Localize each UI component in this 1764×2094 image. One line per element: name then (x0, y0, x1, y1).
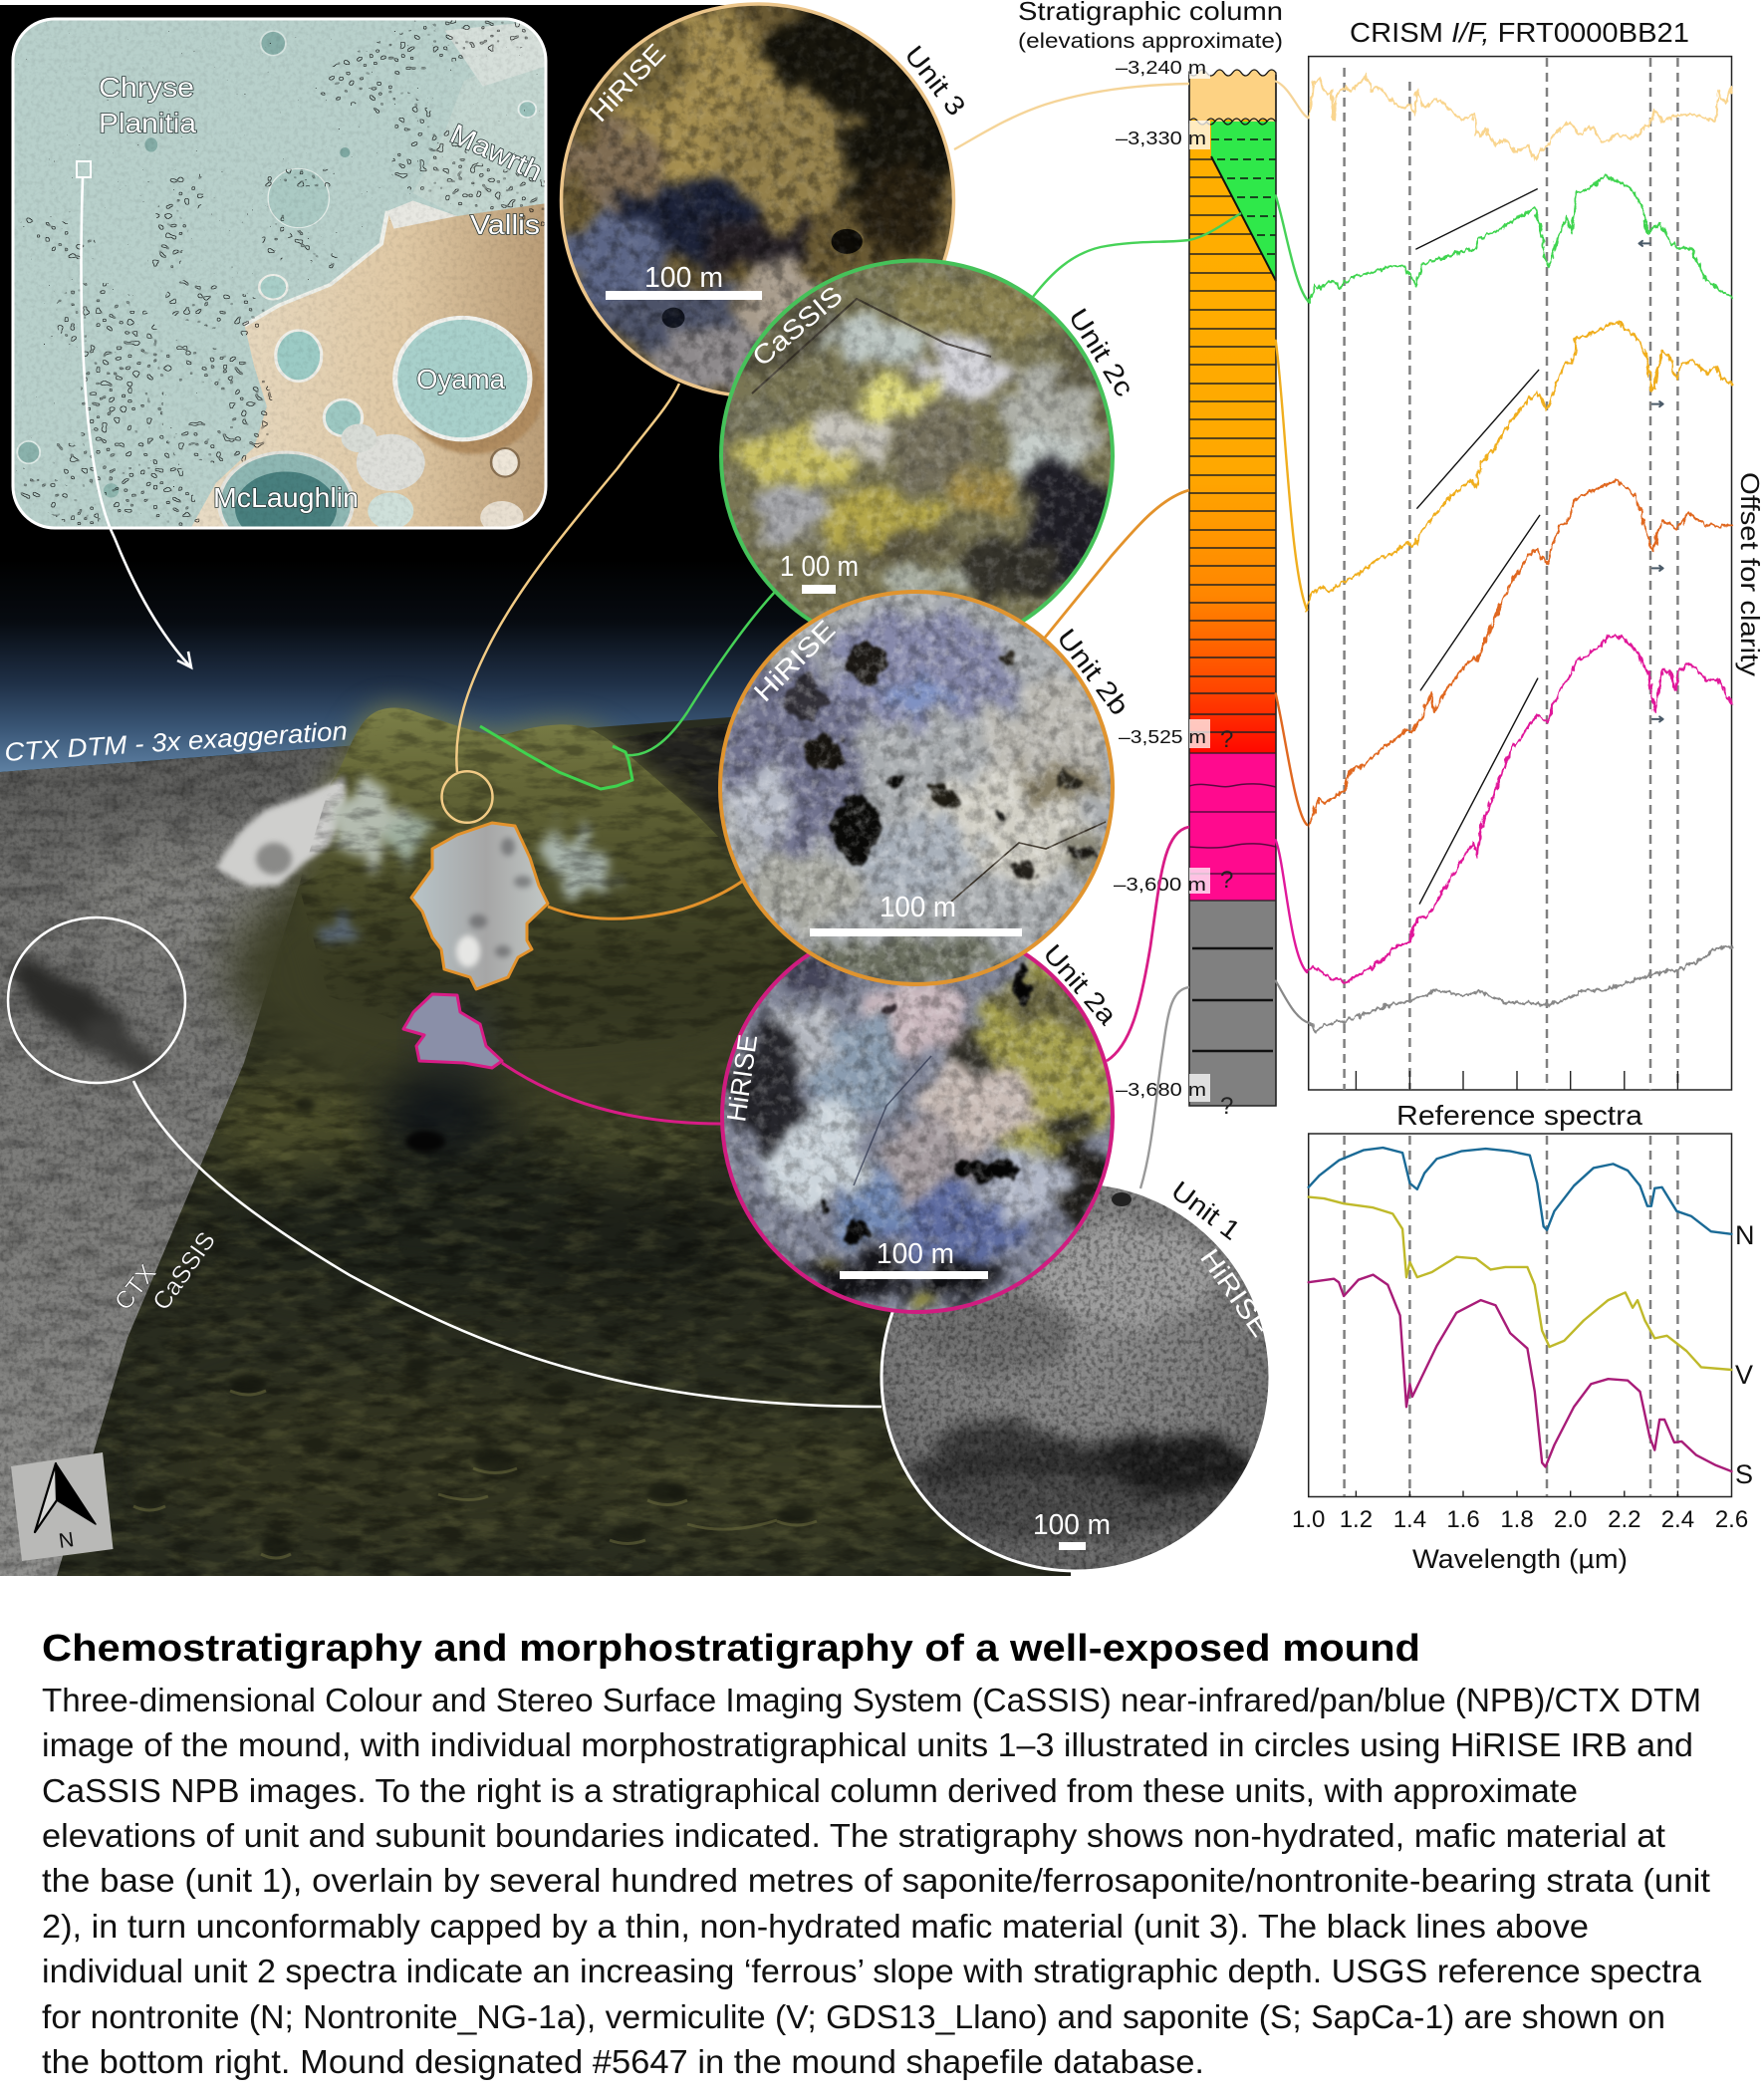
connector: unit 3 circle to mound (456, 384, 679, 772)
elevation label: -3,600 m: ? (1220, 867, 1233, 894)
unit 3 yellow layer (1189, 70, 1276, 125)
map label: Mawrth Vallis: Vallis (470, 209, 540, 240)
stratigraphic column title: (elevations approximate) (1018, 30, 1283, 53)
scale bar: 100 m: 100 m (877, 1238, 954, 1270)
unit 2c green wedge (1211, 122, 1276, 281)
connector: unit 2a circle to mound (502, 1063, 721, 1124)
map label: Mawrth Vallis (445, 118, 547, 240)
connector: unit 2b circle to mound (548, 881, 743, 918)
connector: unit 2c to column (1033, 213, 1241, 297)
x axis tick labels: 2.4 (1661, 1506, 1694, 1533)
spectrum: unit 2a (1307, 637, 1731, 982)
stratigraphic column title (1018, 0, 1283, 53)
scale bar: 100 m (840, 1238, 988, 1279)
x axis tick labels: 1.4 (1393, 1506, 1426, 1533)
map label: Mawrth Vallis: Mawrth (445, 118, 547, 187)
unit labels: Unit 1 (1165, 1176, 1246, 1246)
scale bar: 100 m: 100 m (1033, 1509, 1111, 1541)
ferrous slope lines (1416, 189, 1540, 904)
caption body text: Three-dimensional Colour and Stereo Surface Imaging System (CaSSIS) near-infrared/pan/blue (NPB)/CTX DTM (42, 1682, 1701, 1718)
scale bar: 100 m: 100 m (644, 262, 723, 294)
caption heading: Chemostratigraphy and morphostratigraphy of a well-exposed mound (42, 1628, 1420, 1670)
scale bar: 100 m (810, 892, 1022, 936)
chart: reference spectra (1309, 1134, 1731, 1496)
boundary label: CaSSIS: CaSSIS (147, 1227, 221, 1315)
caption body text: elevations of unit and subunit boundaries indicated. The stratigraphy shows non-hydrated, mafic material at (42, 1817, 1665, 1854)
x axis tick labels (1292, 1506, 1748, 1533)
caption body text: the base (unit 1), overlain by several hundred metres of saponite/ferrosaponite/nontronite-bearing strata (unit (42, 1862, 1710, 1899)
map label: Chryse Planitia: Planitia (99, 108, 196, 138)
x axis title: Wavelength (µm) (1412, 1544, 1628, 1574)
label: HiRISE: HiRISE (748, 615, 841, 707)
elevation label: -3,680 m: ? (1220, 1093, 1233, 1120)
reference spectrum labels: V (1735, 1360, 1753, 1390)
elevation label: -3,680 m (1116, 1074, 1233, 1120)
map frame (13, 19, 546, 528)
reference spectrum labels: S (1735, 1459, 1753, 1489)
spectrum: unit 2b lower (1310, 480, 1731, 825)
elevation label: -3,600 m (1114, 867, 1233, 895)
spectrum: unit 2c (1310, 177, 1731, 303)
x axis tick labels: 1.2 (1340, 1506, 1373, 1533)
caption body text: individual unit 2 spectra indicate an increasing ‘ferrous’ slope with stratigraphic depth. USGS reference spectra (42, 1953, 1702, 1989)
connector: unit 1 to column (1140, 987, 1189, 1188)
caption body text: CaSSIS NPB images. To the right is a stratigraphical column derived from these units, with approximate (42, 1772, 1578, 1809)
reference spectrum labels: N (1735, 1220, 1755, 1250)
photo circle: unit 2b (717, 588, 1116, 986)
spectrum: saponite (1309, 1275, 1731, 1471)
gray layer (1189, 901, 1276, 1106)
unit labels: Unit 2c (1063, 303, 1139, 401)
dark ridge in white circle (0, 944, 160, 1083)
morphostratigraphic outline: unit 2a (403, 994, 502, 1068)
map label: Chryse Planitia: Chryse (99, 72, 194, 103)
connector: unit 1 circle to ridge (133, 1081, 882, 1407)
connector: unit 3 to column (954, 84, 1189, 149)
unit 2b to 2a orange layer (1189, 120, 1276, 753)
ground craters (133, 1098, 817, 1556)
label: HiRISE: HiRISE (584, 38, 671, 128)
chart: CRISM spectra (1276, 57, 1731, 1090)
scene label: CTX DTM: CTX DTM - 3x exaggeration (3, 715, 349, 767)
icon: north arrow (11, 1452, 114, 1561)
x axis tick labels: 1.0 (1292, 1506, 1325, 1533)
elevation label: -3,680 m: –3,680 m (1116, 1079, 1206, 1100)
label: CaSSIS: CaSSIS (747, 280, 849, 373)
x axis tick labels: 1.6 (1446, 1506, 1480, 1533)
photo circle: unit 3 (556, 0, 978, 398)
x axis tick labels: 2.2 (1608, 1506, 1640, 1533)
connector: unit 2b to column (1045, 490, 1189, 638)
shapefile mound outlines (38, 31, 540, 529)
unit labels: Unit 2b (1051, 624, 1134, 720)
connector: unit 2a to column (1107, 827, 1189, 1061)
label: HiRISE: HiRISE (721, 1033, 763, 1124)
spectrum: nontronite (1309, 1148, 1731, 1234)
elevation label: -3,525 m: –3,525 m (1119, 726, 1206, 747)
connector: unit 2c circle to mound (626, 592, 775, 755)
unit labels (898, 40, 1246, 1246)
photo circle: unit 2a (720, 952, 1115, 1314)
icon: north arrow: N (58, 1528, 76, 1553)
caption body text: 2), in turn unconformably capped by a thin, non-hydrated mafic material (unit 3). The black lines above (42, 1908, 1589, 1945)
morphostratigraphic outline: unit 2c (480, 726, 632, 789)
map label: McLaughlin: McLaughlin (213, 482, 359, 513)
scale bar: 100 m (780, 551, 859, 594)
scale bar: 100 m: 100 m (880, 892, 956, 923)
boundary label: CTX: CTX (110, 1259, 162, 1316)
photo circle: unit 2c (719, 259, 1115, 622)
elevation label: -3,240 m: –3,240 m (1116, 57, 1206, 78)
caption body text (42, 1682, 1710, 2080)
spectrum: vermiculite (1309, 1197, 1731, 1370)
magenta layer (1189, 753, 1276, 901)
reference spectrum labels (1735, 1220, 1755, 1489)
location circle: unit 1 (8, 917, 185, 1083)
elevation label: -3,330 m (1116, 121, 1210, 149)
caption body text: for nontronite (N; Nontronite_NG-1a), vermiculite (V; GDS13_Llano) and saponite (S; SapCa-1) are shown on (42, 1998, 1665, 2035)
scale bar: 100 m (606, 262, 762, 300)
column tie lines (1276, 82, 1310, 1023)
photo circle: unit 1 (877, 1176, 1276, 1574)
unit labels: Unit 3 (898, 40, 971, 122)
x axis tick labels: 2.6 (1715, 1506, 1748, 1533)
map label: Chryse Planitia (99, 72, 196, 138)
caption body text: image of the mound, with individual morphostratigraphical units 1–3 illustrated in circles using HiRISE IRB and (42, 1726, 1693, 1763)
spectrum: unit 1 (1310, 947, 1731, 1031)
unit labels: Unit 2a (1037, 938, 1124, 1031)
stratigraphic column (1189, 70, 1276, 1106)
location circle: unit 3 (442, 771, 492, 823)
elevation label: -3,525 m (1119, 719, 1233, 753)
caption body text: the bottom right. Mound designated #5647 in the mound shapefile database. (42, 2043, 1204, 2080)
band shift arrows (1639, 241, 1663, 721)
scattered small mound dots (13, 20, 540, 529)
morphostratigraphic outline: unit 2b (411, 823, 548, 989)
chart title: CRISM: CRISM I/F, FRT0000BB21 (1350, 17, 1689, 48)
map label: Oyama: Oyama (416, 364, 505, 394)
connector: map to scene arrow (82, 177, 191, 667)
3D mound scene (0, 0, 1096, 1584)
spectrum: unit 3 (1309, 74, 1731, 160)
chart title: Reference spectra: Reference spectra (1396, 1100, 1642, 1131)
elevation label: -3,525 m: ? (1220, 726, 1233, 753)
mound body (201, 692, 807, 1162)
x axis tick labels: 1.8 (1500, 1506, 1534, 1533)
x axis tick labels: 2.0 (1554, 1506, 1587, 1533)
label: HiRISE: HiRISE (1194, 1243, 1276, 1342)
elevation label: -3,600 m: –3,600 m (1114, 874, 1206, 895)
spectrum: unit 2b upper (1307, 321, 1731, 610)
elevation label: -3,330 m: –3,330 m (1116, 128, 1206, 148)
map location marker (77, 161, 91, 177)
scale bar: 100 m: 1 00 m (780, 551, 859, 583)
context map inset (13, 19, 547, 554)
